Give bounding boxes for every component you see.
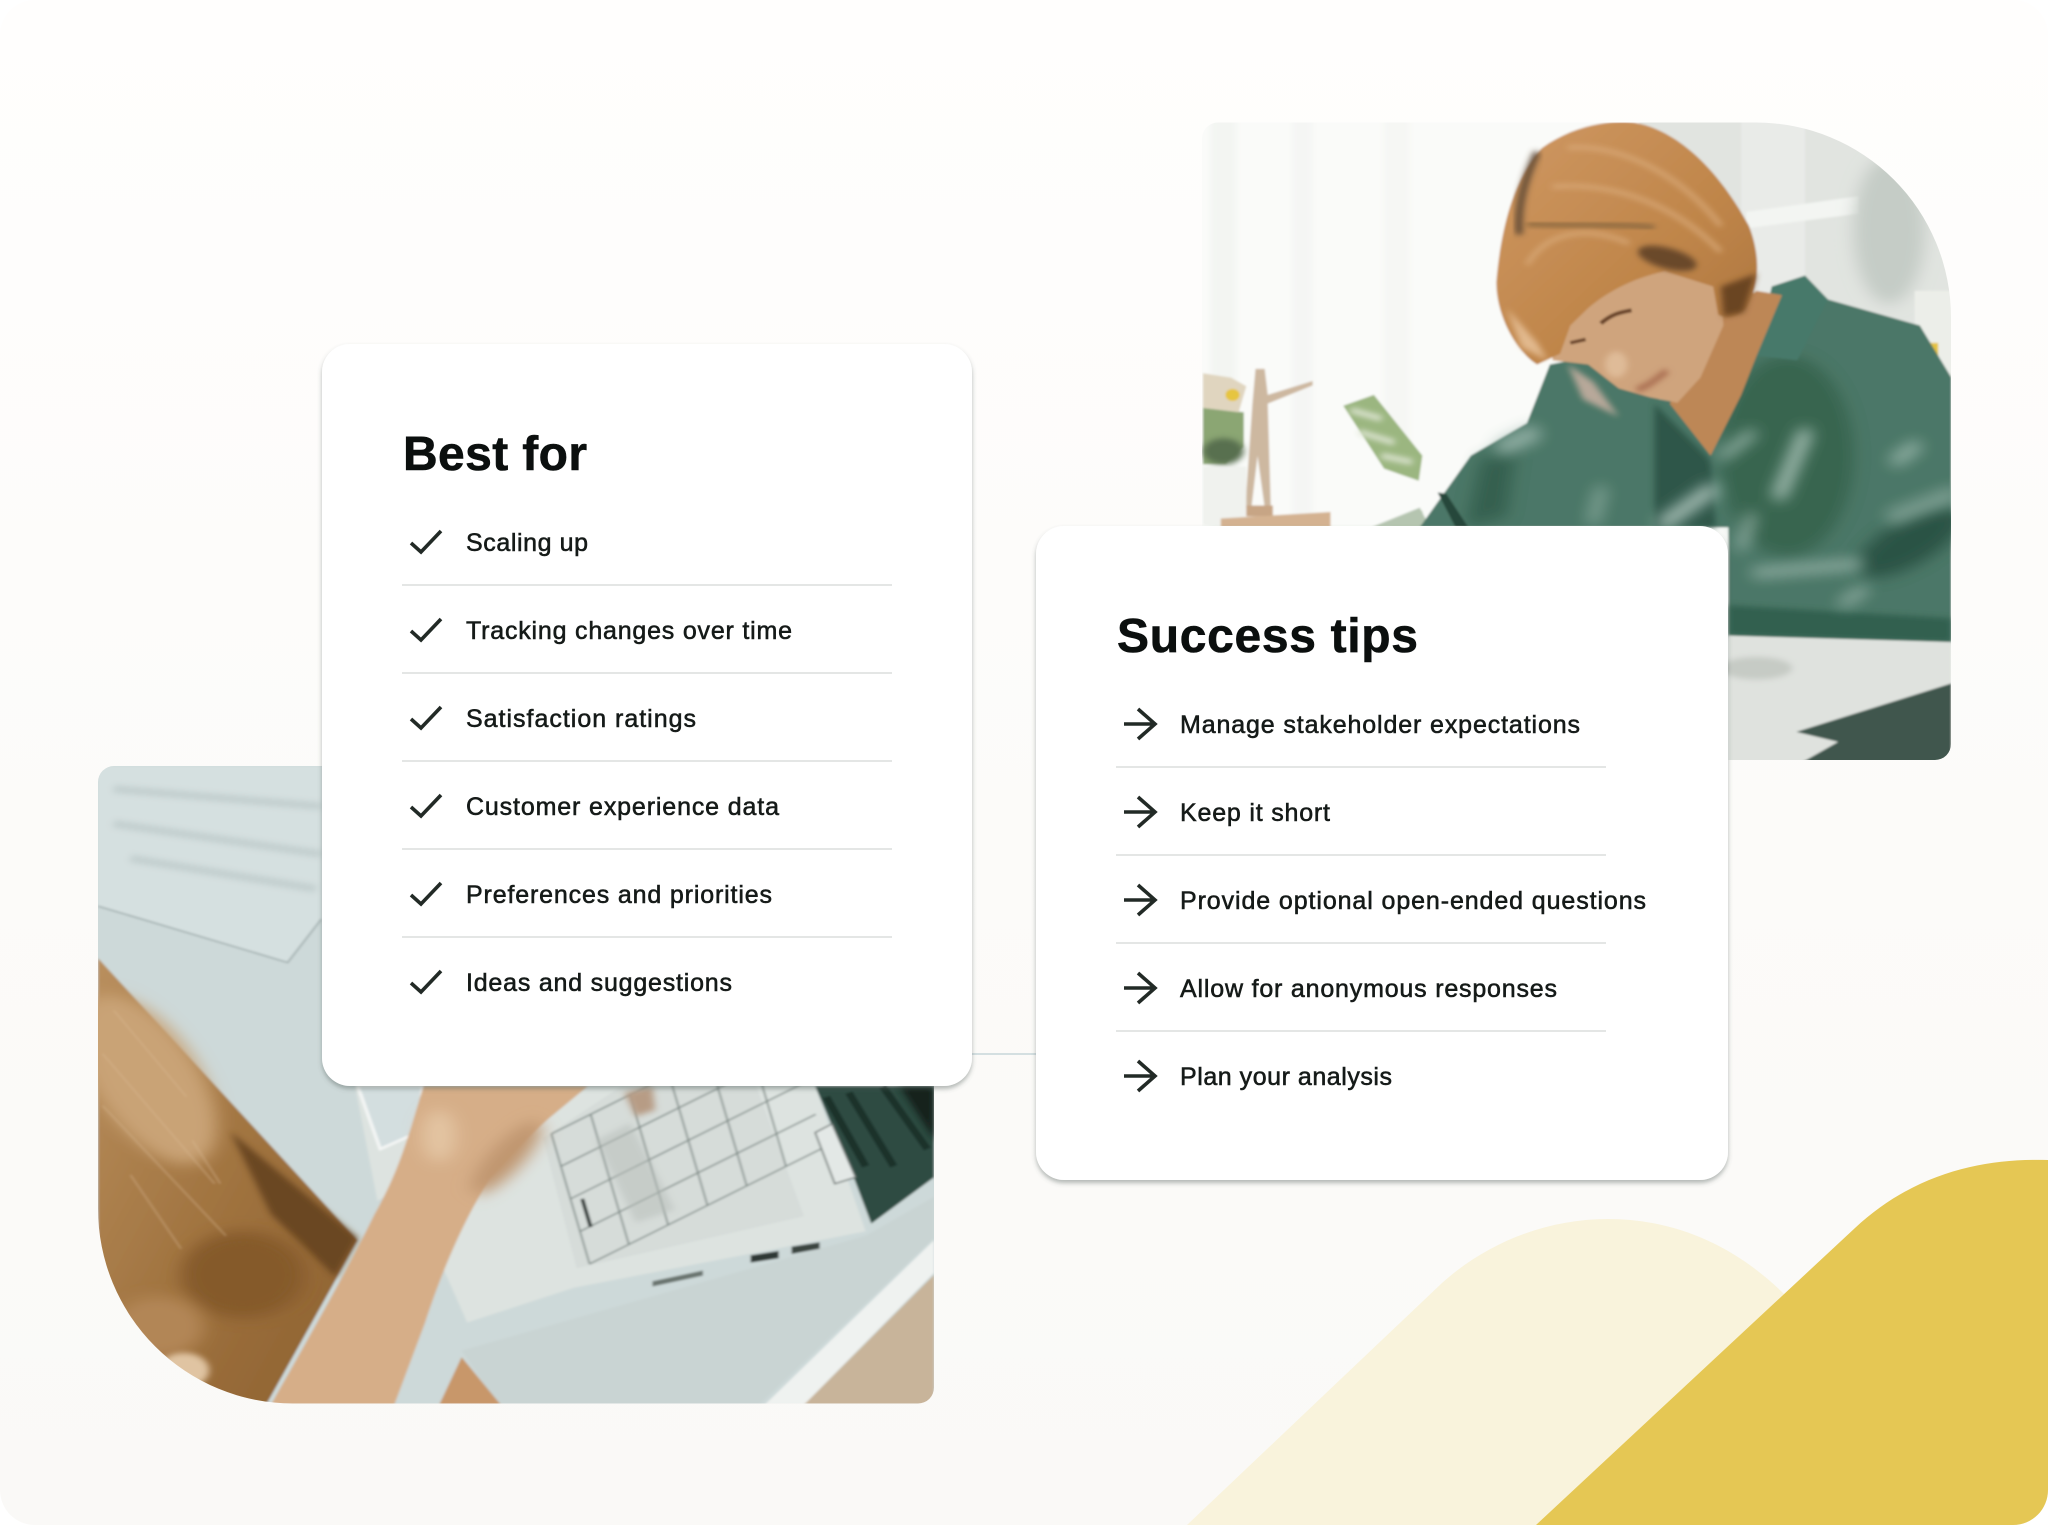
item: preferences and priorities: Preferences and priorities — [466, 881, 772, 909]
item: plan your analysis: Plan your analysis — [1180, 1063, 1392, 1091]
green shirt — [1420, 276, 1974, 642]
dark laptop screen — [815, 1086, 934, 1224]
item: manage stakeholder expectations: Manage stakeholder expectations — [1180, 711, 1580, 739]
skin below desk — [439, 1357, 501, 1405]
brown fabric and wood — [98, 958, 362, 1402]
heading: success tips: Success tips — [1117, 610, 1418, 663]
arm highlight — [422, 1110, 456, 1162]
blurred plants and figurine — [1203, 369, 1430, 527]
item: scaling up: Scaling up — [466, 529, 588, 557]
keyboard — [549, 1086, 822, 1266]
item: keep it short — [1124, 797, 1330, 827]
item: allow for anonymous responses: Allow for anonymous responses — [1180, 975, 1557, 1003]
floor beyond desk — [804, 1275, 934, 1405]
silver hinge — [815, 1124, 856, 1184]
panel: success tips — [1036, 526, 1728, 1180]
laptop base — [355, 1086, 866, 1322]
item: satisfaction ratings: Satisfaction ratings — [466, 705, 696, 733]
connector line between cards — [960, 1053, 1040, 1055]
pale yellow hill — [1187, 1219, 1850, 1525]
laptop screen edge — [358, 1086, 422, 1149]
item: tracking changes over time: Tracking changes over time — [466, 617, 792, 645]
heading: best for: Best for — [403, 428, 587, 481]
hair — [1496, 122, 1757, 417]
photo: hand on laptop — [98, 766, 934, 1404]
pen — [1438, 492, 1468, 527]
photo backdrop — [1202, 122, 1951, 750]
shirt highlights — [1504, 434, 1951, 603]
photo: woman writing at desk — [1202, 122, 1951, 760]
blurred paper sheet — [98, 906, 322, 964]
desk surface — [98, 766, 934, 1404]
desk edge highlight — [765, 1240, 934, 1405]
item: ideas and suggestions: Ideas and suggestions — [466, 969, 732, 997]
card background — [1036, 526, 1728, 1180]
item: customer experience data: Customer experience data — [466, 793, 779, 821]
card background — [322, 344, 972, 1086]
hand and arm — [271, 1086, 588, 1405]
panel: best for — [322, 344, 972, 1086]
laptop front ports — [652, 1242, 820, 1286]
item: keep it short: Keep it short — [1180, 799, 1330, 827]
golden yellow hill — [1536, 1160, 2048, 1525]
face — [1552, 260, 1723, 403]
desk and folder — [1721, 636, 1951, 764]
neck and chest — [1670, 291, 1782, 456]
decorative yellow shapes — [1187, 1160, 2048, 1525]
white desk front — [462, 1197, 934, 1405]
item: provide optional open-ended questions: Provide optional open-ended questions — [1180, 887, 1646, 915]
facial features — [1570, 310, 1667, 390]
arm shading — [470, 1120, 552, 1202]
item: scaling up — [411, 529, 588, 557]
